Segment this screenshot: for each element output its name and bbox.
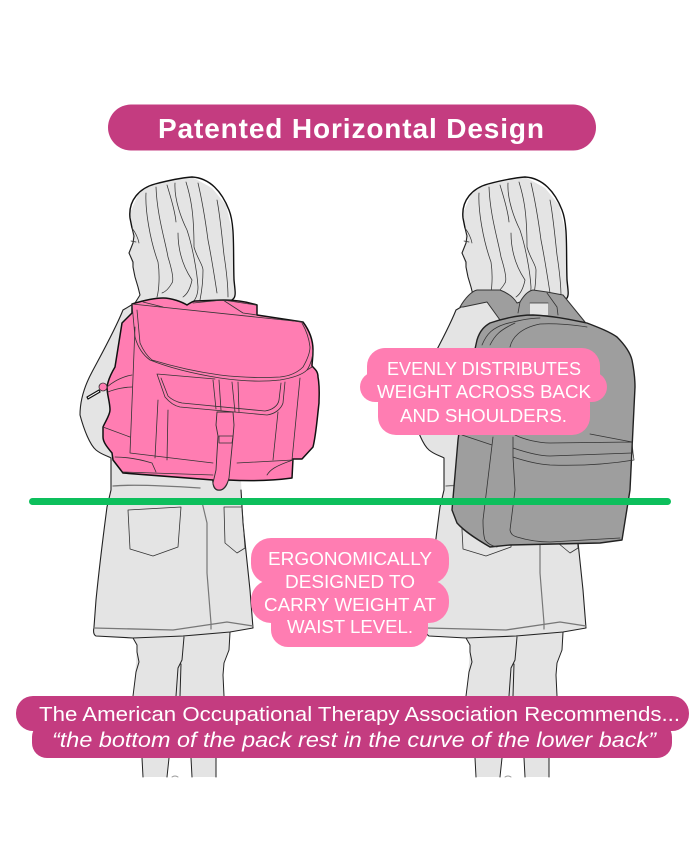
callout: ergonomically designed: DESIGNED TO <box>285 571 415 592</box>
callout: evenly distributes weight: WEIGHT ACROSS BACK <box>377 382 591 402</box>
banner: occupational therapy recommendation: The American Occupational Therapy Association Recommends... <box>39 703 680 726</box>
figure: girl wearing horizontal pink backpack <box>80 177 319 777</box>
icon: pink horizontal backpack <box>87 298 319 490</box>
callout: ergonomically designed <box>251 538 449 647</box>
callout: ergonomically designed: WAIST LEVEL. <box>287 616 413 637</box>
callout: evenly distributes weight: EVENLY DISTRIBUTES <box>387 359 581 379</box>
title: Patented Horizontal Design <box>158 113 544 144</box>
callout: evenly distributes weight: AND SHOULDERS. <box>400 406 567 426</box>
icon: zipper pull <box>87 383 107 399</box>
icon: gray vertical backpack <box>452 290 635 547</box>
callout: evenly distributes weight <box>360 348 607 435</box>
waist level line <box>29 498 671 505</box>
banner: occupational therapy recommendation: “the bottom of the pack rest in the curve of the lower back” <box>52 729 657 752</box>
callout: ergonomically designed: CARRY WEIGHT AT <box>264 594 436 615</box>
figure: girl wearing vertical gray backpack <box>413 177 635 777</box>
callout: ergonomically designed: ERGONOMICALLY <box>268 548 432 569</box>
banner: occupational therapy recommendation <box>16 696 689 758</box>
title <box>108 104 596 150</box>
